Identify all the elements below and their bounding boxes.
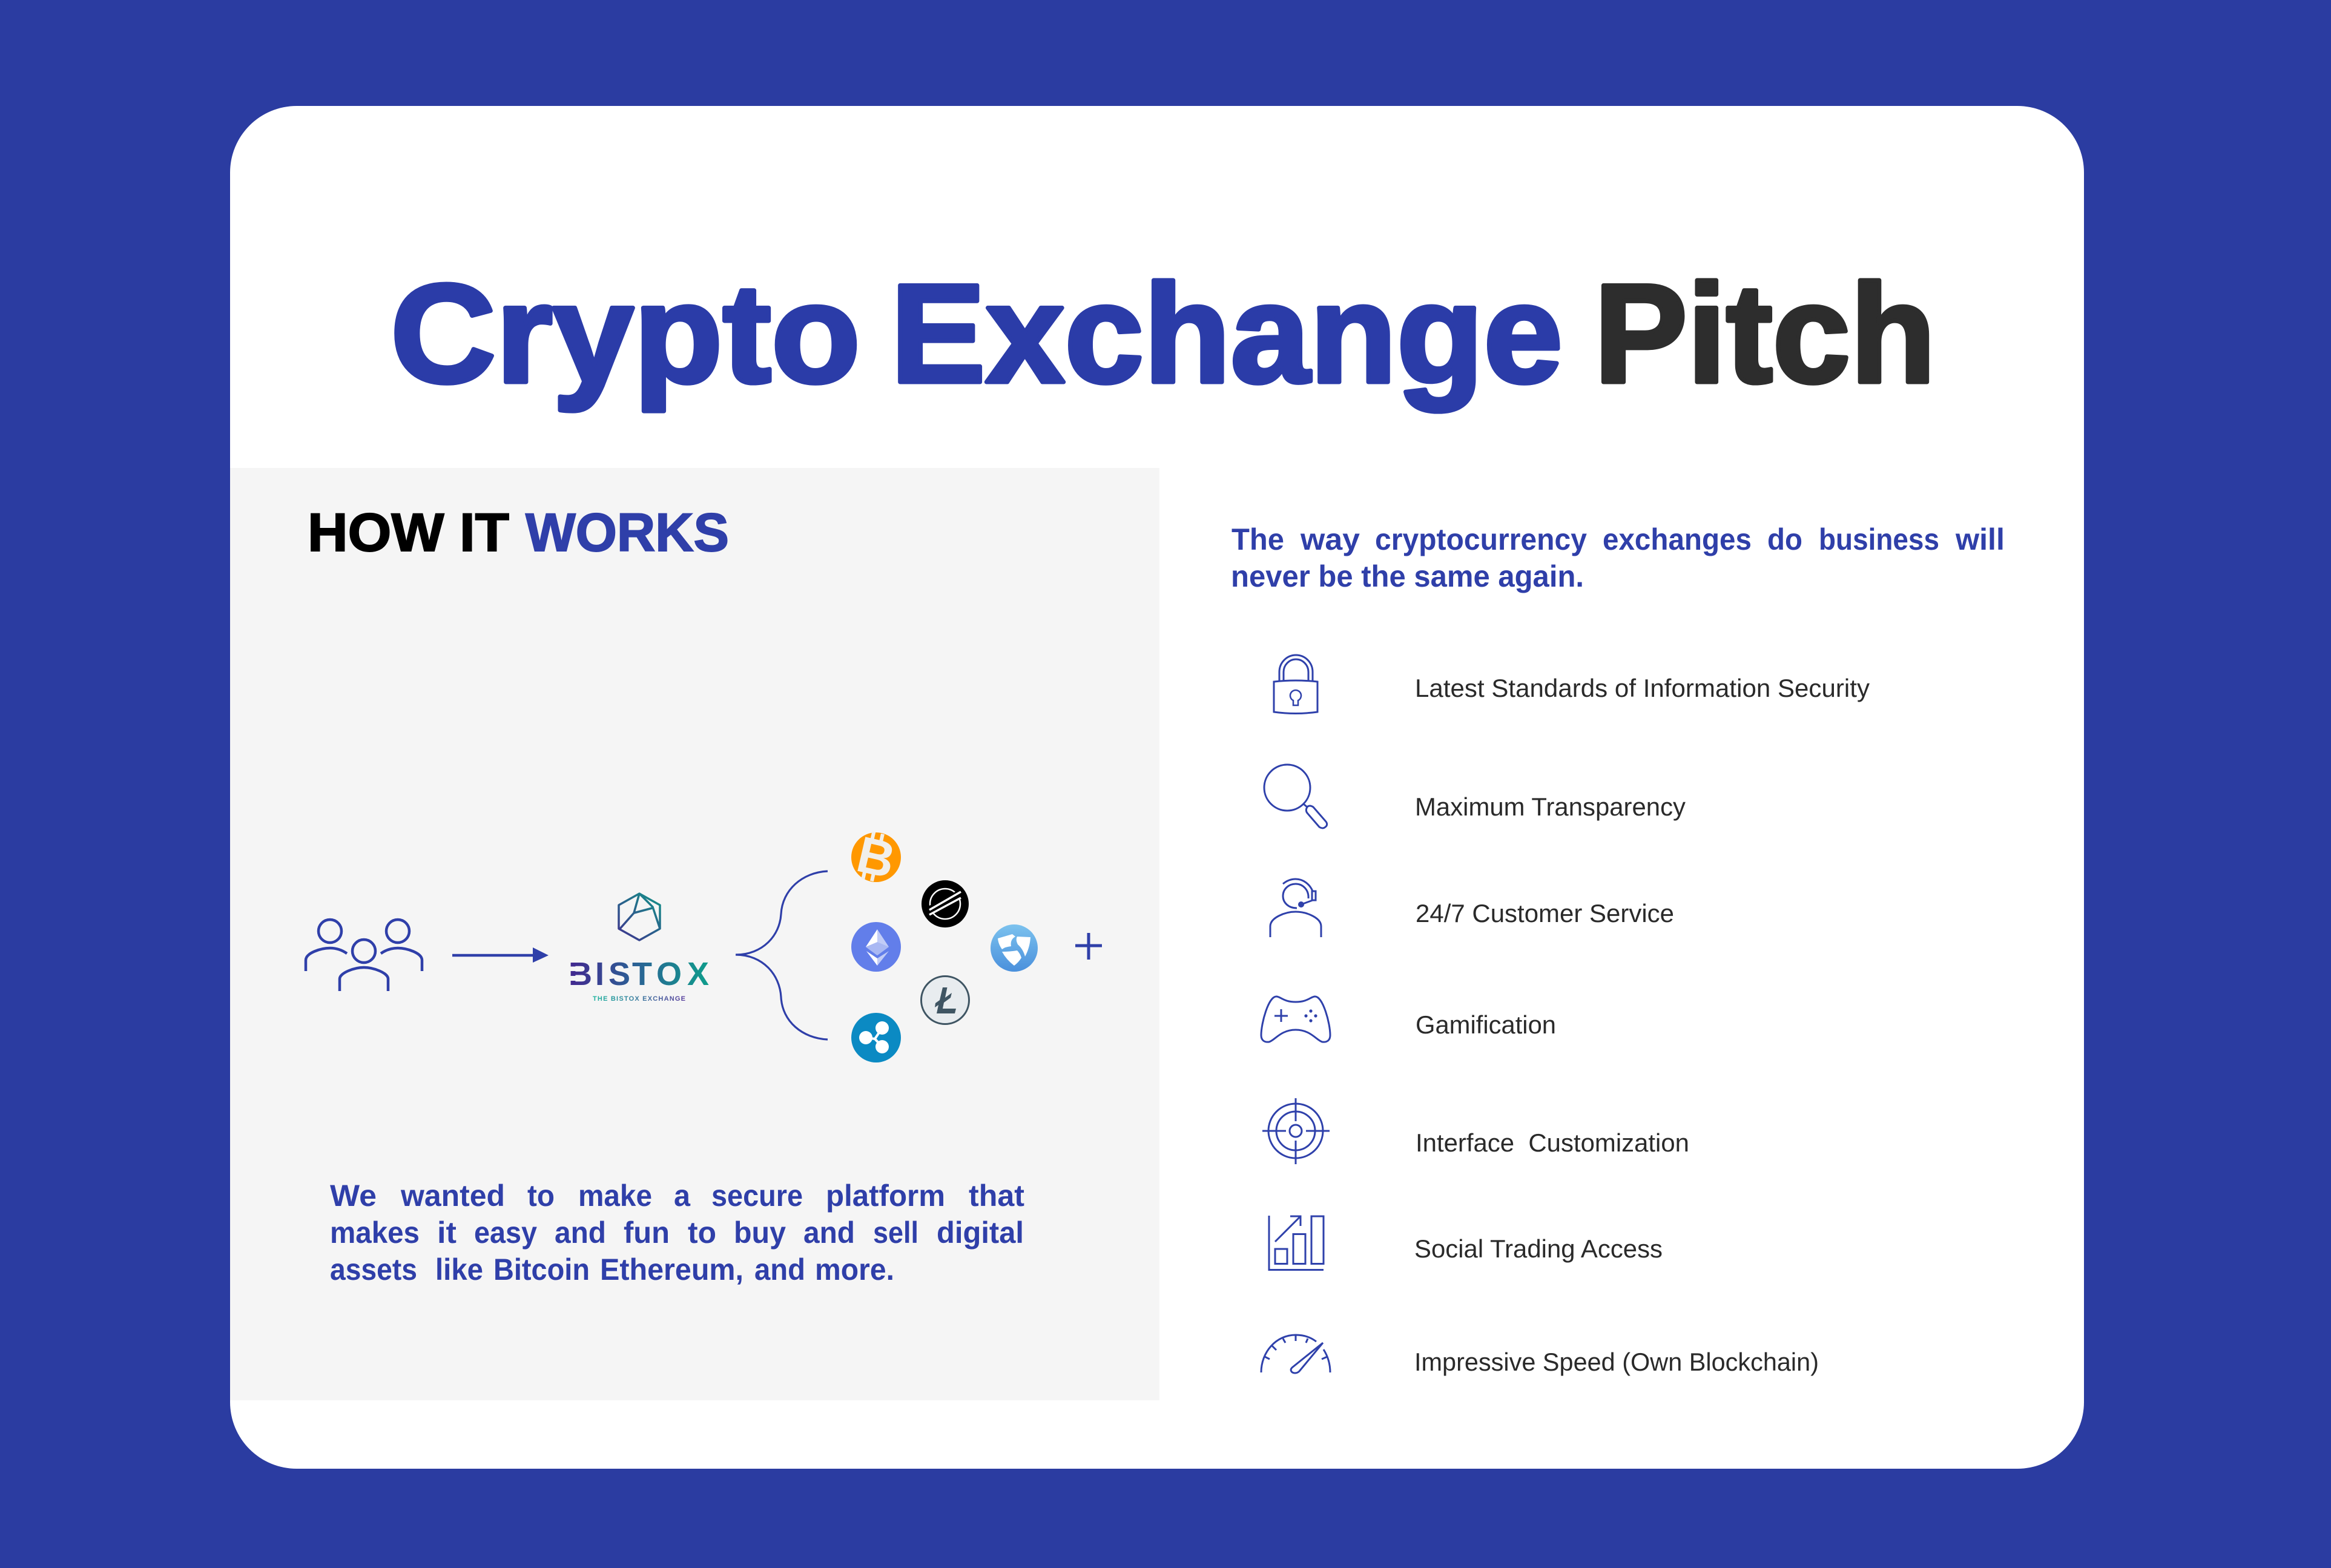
description paragraph: and <box>754 1253 805 1286</box>
coin: stellar <box>922 880 969 927</box>
icon: headset agent <box>1270 879 1321 937</box>
coin: litecoin <box>922 976 969 1024</box>
label: Impressive Speed (Own Blockchain) <box>1414 1348 1819 1376</box>
feature: speed <box>1261 1335 1819 1376</box>
arrow: users to exchange <box>452 947 549 963</box>
heading: how it works: WORKS <box>526 502 729 562</box>
description paragraph: assets <box>330 1253 417 1286</box>
label: Interface Customization <box>1416 1128 1689 1157</box>
right intro text: The <box>1231 522 1284 556</box>
logo tagline: THE BISTOX EXCHANGE <box>593 995 685 1003</box>
description paragraph: Ethereum, <box>600 1253 743 1286</box>
label: Maximum Transparency <box>1415 792 1686 821</box>
title: Crypto <box>391 255 860 412</box>
coin: bitcoin: B <box>852 825 900 889</box>
icon: plus more <box>1075 933 1102 960</box>
right intro text: way <box>1300 522 1360 556</box>
title: Exchange <box>891 255 1563 412</box>
description paragraph: platform <box>826 1179 945 1213</box>
label: Gamification <box>1416 1010 1556 1039</box>
label: 24/7 Customer Service <box>1416 899 1674 927</box>
description paragraph: fun <box>624 1216 670 1250</box>
logo mark <box>619 894 660 940</box>
description paragraph: like <box>435 1253 483 1286</box>
description paragraph: and <box>555 1216 606 1250</box>
description paragraph: and <box>803 1216 855 1250</box>
description paragraph: wanted <box>400 1179 505 1213</box>
title: Pitch <box>1594 255 1936 412</box>
heading: how it works: HOW IT <box>308 502 509 562</box>
feature: gamification <box>1261 996 1556 1042</box>
logo wordmark: BISTOX <box>569 956 709 992</box>
description paragraph: that <box>969 1179 1024 1213</box>
description paragraph: buy <box>734 1216 786 1250</box>
description paragraph: secure <box>711 1179 803 1213</box>
icon: speedometer <box>1261 1335 1330 1373</box>
description paragraph: digital <box>937 1216 1024 1250</box>
feature: security <box>1274 655 1870 713</box>
title <box>391 255 1936 412</box>
logo: Bistox <box>568 894 709 1003</box>
coin: ethereum <box>851 922 901 972</box>
description paragraph: a <box>674 1179 691 1213</box>
description paragraph: to <box>527 1179 555 1213</box>
icon: magnifier <box>1264 765 1327 828</box>
icon: game controller <box>1261 996 1330 1042</box>
description paragraph: make <box>578 1179 652 1213</box>
right intro text: cryptocurrency <box>1375 522 1587 556</box>
icon: target <box>1262 1098 1330 1164</box>
right intro text: do <box>1767 522 1802 556</box>
logo wordmark stem cut-outs <box>568 966 578 981</box>
description paragraph: to <box>688 1216 716 1250</box>
bracket: exchange to coins <box>736 871 828 1039</box>
white card <box>230 106 2084 1469</box>
right intro text: business <box>1819 522 1939 556</box>
coin: nem <box>991 924 1038 972</box>
description paragraph: Bitcoin <box>493 1253 590 1286</box>
label: Social Trading Access <box>1414 1234 1663 1263</box>
right intro text: exchanges <box>1603 522 1752 556</box>
icon: growth chart <box>1269 1216 1324 1270</box>
right intro text: will <box>1955 522 2005 556</box>
icon: padlock <box>1274 655 1317 713</box>
description paragraph: easy <box>474 1216 537 1250</box>
feature: transparency <box>1264 765 1686 828</box>
description paragraph: sell <box>873 1216 918 1250</box>
feature: customer service <box>1270 879 1674 937</box>
coin: ripple <box>851 1013 901 1062</box>
label: Latest Standards of Information Security <box>1415 674 1870 702</box>
feature: customization <box>1262 1098 1689 1164</box>
heading: how it works <box>308 502 729 562</box>
feature: social trading <box>1269 1216 1663 1270</box>
description paragraph: it <box>437 1216 457 1250</box>
right intro text: never be the same again. <box>1231 559 1584 593</box>
description paragraph: more. <box>815 1253 894 1286</box>
description paragraph: We <box>330 1179 377 1213</box>
description paragraph: makes <box>330 1216 420 1250</box>
icon: users group <box>306 920 422 991</box>
panel: how it works <box>230 468 1159 1400</box>
